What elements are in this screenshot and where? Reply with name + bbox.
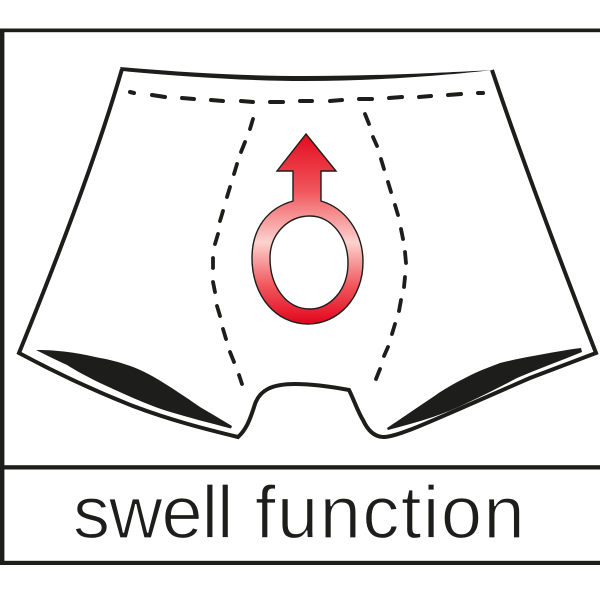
icon: male symbol with up arrow: [252, 134, 363, 324]
right seam stitching: [365, 114, 406, 379]
right pocket: [387, 348, 582, 430]
caption: function: [255, 471, 526, 554]
caption: swell: [73, 471, 232, 554]
left pocket: [36, 350, 232, 428]
waist stitching: [130, 92, 483, 102]
shorts outline: [19, 69, 596, 437]
waistband: [120, 67, 493, 81]
left seam stitching: [213, 119, 253, 384]
